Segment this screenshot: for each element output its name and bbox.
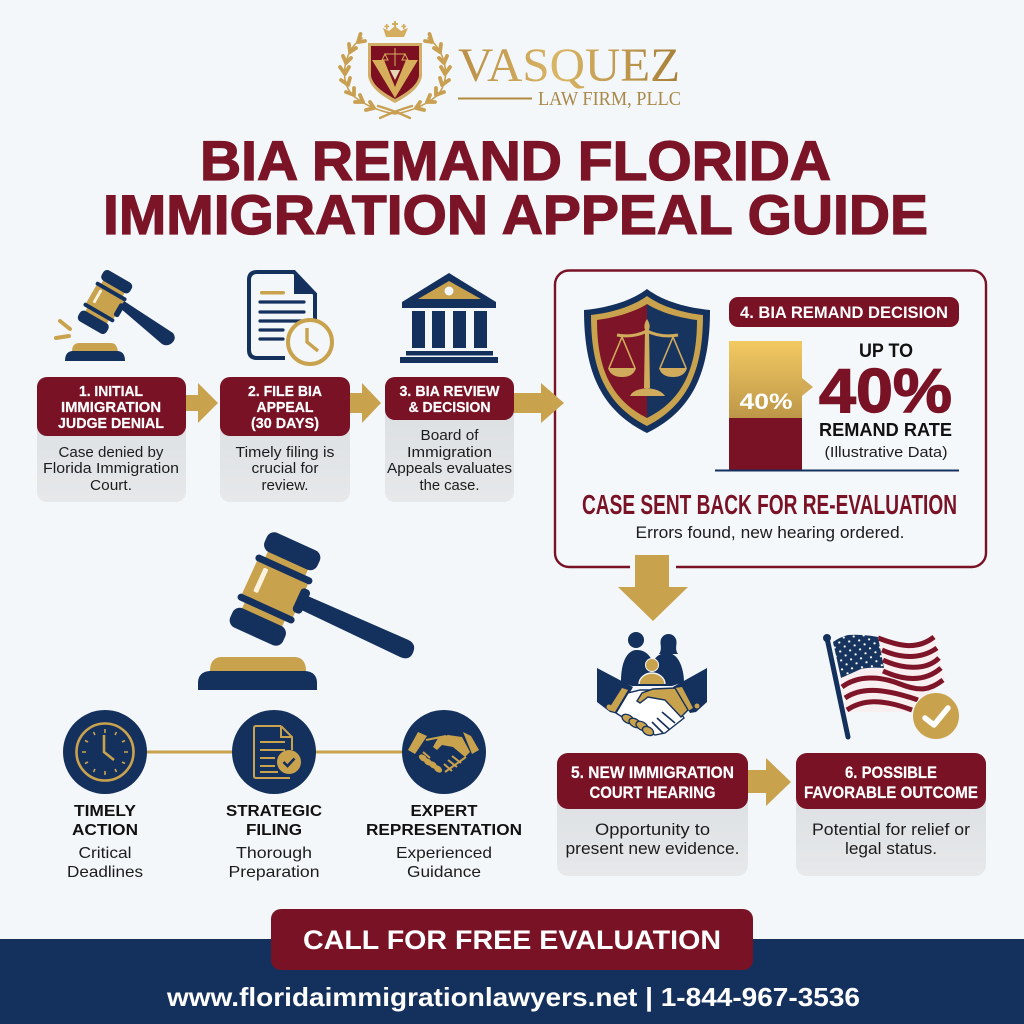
icon: document with check xyxy=(254,726,301,778)
step 4 heading xyxy=(729,297,959,327)
footer contact line: www.floridaimmigrationlawyers.net | 1-844-967-3536 xyxy=(166,982,860,1012)
step 5: new immigration court hearing: Opportunity to xyxy=(595,820,710,839)
key point: expert representation: EXPERT xyxy=(410,803,478,820)
step 5: new immigration court hearing: 5. NEW IMMIGRATION xyxy=(571,763,734,782)
call to action button: CALL FOR FREE EVALUATION xyxy=(303,925,721,955)
step 2: file BIA appeal: review. xyxy=(262,477,308,494)
key point: expert representation: Guidance xyxy=(407,864,481,881)
step 2: file BIA appeal: APPEAL xyxy=(256,399,314,416)
icon: handshake xyxy=(408,732,479,774)
icon: courthouse xyxy=(400,273,498,363)
title: IMMIGRATION APPEAL GUIDE xyxy=(103,183,928,246)
panel: step 4 BIA remand decision xyxy=(555,270,986,572)
arrow: step 2 to 3 xyxy=(350,383,381,423)
step 1: initial immigration judge denial: 1. INITIAL xyxy=(79,383,143,400)
bar chart: 40 percent remand: 40% xyxy=(740,389,792,414)
key point: strategic filing: STRATEGIC xyxy=(226,803,322,820)
key point: strategic filing xyxy=(226,710,322,881)
step 1: initial immigration judge denial: IMMIGRATION xyxy=(61,399,161,416)
step 3: BIA review and decision: the case. xyxy=(420,477,480,494)
key point: timely action: Critical xyxy=(78,845,132,862)
step 3: BIA review and decision xyxy=(385,377,514,502)
logo: Vasquez Law Firm xyxy=(340,21,681,118)
step 1: initial immigration judge denial: Florida Immigration xyxy=(43,460,179,477)
large gavel illustration xyxy=(198,529,417,690)
step 5: new immigration court hearing: present new evidence. xyxy=(566,839,740,858)
key point: expert representation: REPRESENTATION xyxy=(366,822,522,839)
key point: timely action xyxy=(63,710,147,881)
step 6: possible favorable outcome xyxy=(796,753,986,876)
key point: strategic filing: Thorough xyxy=(236,845,312,862)
step 3: BIA review and decision: Appeals evaluates xyxy=(387,460,512,477)
key point: strategic filing: Preparation xyxy=(228,864,320,881)
key point: strategic filing: FILING xyxy=(246,822,302,839)
step 3: BIA review and decision: & DECISION xyxy=(408,399,490,416)
icon: American flag with check badge xyxy=(823,634,960,740)
title: BIA REMAND FLORIDA xyxy=(200,129,831,192)
logo wordmark: VASQUEZ xyxy=(458,39,680,92)
step 1: initial immigration judge denial: Court. xyxy=(90,477,132,494)
key point: timely action: TIMELY xyxy=(74,803,136,820)
icon: document with clock xyxy=(249,272,332,364)
step 5: new immigration court hearing xyxy=(557,753,748,876)
bar chart: 40 percent remand xyxy=(715,341,959,472)
step 1: initial immigration judge denial: JUDGE DENIAL xyxy=(58,415,164,432)
connector line between key points xyxy=(105,750,444,754)
step 6: possible favorable outcome: FAVORABLE OUTCOME xyxy=(804,783,978,802)
step 2: file BIA appeal: (30 DAYS) xyxy=(251,415,319,432)
icon: clock xyxy=(76,724,134,780)
arrow: step 4 down to 5 xyxy=(618,555,688,621)
key point: expert representation: Experienced xyxy=(396,845,492,862)
logo crown xyxy=(383,21,408,37)
logo rule xyxy=(458,98,532,100)
step 6: possible favorable outcome: 6. POSSIBLE xyxy=(845,763,937,782)
case sent back note: Errors found, new hearing ordered. xyxy=(636,523,904,542)
icon: family and handshake xyxy=(597,632,707,737)
step 1: initial immigration judge denial: Case denied by xyxy=(58,444,164,461)
logo shield xyxy=(368,43,422,103)
step 4 heading: 4. BIA REMAND DECISION xyxy=(740,303,948,322)
key point: timely action: Deadlines xyxy=(67,864,143,881)
statistic: up to 40 percent remand rate: (Illustrative Data) xyxy=(824,444,948,461)
step 5: new immigration court hearing: COURT HEARING xyxy=(590,783,716,802)
statistic: up to 40 percent remand rate xyxy=(819,341,952,461)
step 3: BIA review and decision: Board of xyxy=(420,427,479,444)
statistic: up to 40 percent remand rate: REMAND RATE xyxy=(819,420,952,440)
icon: shield with scales xyxy=(584,289,710,433)
logo wreath xyxy=(340,34,450,118)
key point: expert representation xyxy=(366,710,522,881)
statistic: up to 40 percent remand rate: 40% xyxy=(819,357,952,426)
call to action button xyxy=(271,909,753,970)
step 1: initial immigration judge denial xyxy=(37,377,186,502)
arrow: step 3 to 4 xyxy=(514,383,564,423)
step 2: file BIA appeal: crucial for xyxy=(252,460,318,477)
step 2: file BIA appeal xyxy=(220,377,350,502)
footer band xyxy=(0,939,1024,1024)
key point: timely action: ACTION xyxy=(72,822,138,839)
arrow: step 1 to 2 xyxy=(186,383,218,423)
step 6: possible favorable outcome: legal status. xyxy=(845,839,937,858)
title xyxy=(103,129,928,246)
statistic: up to 40 percent remand rate: UP TO xyxy=(859,341,913,362)
logo subtitle: LAW FIRM, PLLC xyxy=(538,88,681,110)
step 2: file BIA appeal: Timely filing is xyxy=(236,444,334,461)
arrow: step 5 to 6 xyxy=(748,758,791,806)
step 2: file BIA appeal: 2. FILE BIA xyxy=(248,383,322,400)
step 6: possible favorable outcome: Potential for relief or xyxy=(812,820,970,839)
icon: small gavel with sparks xyxy=(56,268,175,361)
step 3: BIA review and decision: 3. BIA REVIEW xyxy=(400,383,500,400)
step 3: BIA review and decision: Immigration xyxy=(407,444,492,461)
